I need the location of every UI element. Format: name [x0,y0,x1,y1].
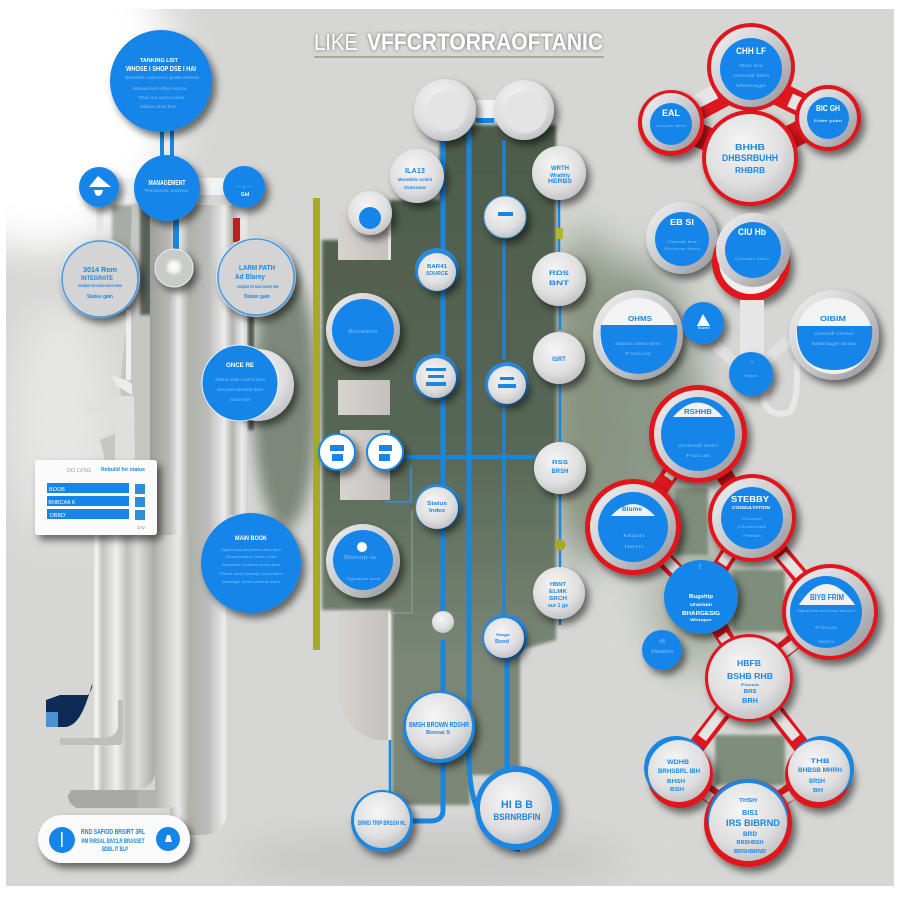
blue node center: Course [742,516,763,521]
node: upper center: BAR41 [427,264,447,270]
pill: footer note: RND SAFIOD BRSIRT 3RL [81,829,146,836]
blue node right [716,213,790,287]
connector: top circle to hub [162,130,172,160]
node: center lower [534,442,586,494]
pale node center: HBFB [737,659,761,668]
pale node bottom: BIS1 [742,810,758,817]
circle: ring upper left: Buccaneers [348,329,378,335]
pale node lower left: BSH [670,787,685,793]
node: small lower: Bond [495,639,509,645]
blue blob node: Uranium [690,602,712,607]
olive stripe [313,198,320,650]
blue node center: CONSULTATION [732,505,770,510]
node: lower center: Index [429,508,445,514]
blue node right [782,564,878,660]
pale node center [705,634,793,722]
node: right 2: BNT [549,281,570,287]
circle: lower left: Think and Mostly cost item [219,571,284,576]
node: bottom right [475,766,559,850]
pale node lower left: WDHB [667,759,689,766]
circle: hub [134,155,200,221]
pale node center: BRS [744,689,757,695]
small blue node: Alanskon [651,649,673,655]
blue blob node: ⋮ [698,563,702,570]
pill: footer note: RM RIRSAL BIVCLR BRASSET [82,839,145,845]
circle: right detail: Ad Blarey [235,274,265,281]
node: right lower [533,567,585,619]
node: middle right [485,362,529,406]
top blue node: CHH LF [736,46,766,56]
node: white pair right [367,434,403,470]
connector: hub to ball [173,215,179,252]
connector: white stems [100,205,244,240]
pale node bottom [704,779,792,867]
center pale node: DHBSRBUHH [722,153,778,163]
pale node center: BRH [742,698,758,705]
node: upper center [415,248,459,292]
red tab [233,218,240,242]
node: lower center: Status [427,501,447,507]
blue node center: STEBBY [731,495,770,504]
circle: right detail: LARM PATH [239,265,275,272]
pale node bottom: THSH [739,798,757,804]
pipes: left column [44,205,254,835]
square icons [135,484,145,520]
half-dome node left [593,290,683,380]
blue node top: Overall item [678,443,718,448]
pill icon right [156,827,180,851]
circle: left detail: 3014 Rom [83,267,117,274]
circle: top heading: Total cue source area [138,95,185,100]
blue node left: Source item [664,246,701,251]
circle: ring upper left [326,293,400,367]
node: center lower: RSS [552,460,568,466]
left blue node: EAL [662,108,681,118]
blue node left: Blume [622,507,643,513]
blue blob node: Bugship [689,594,713,600]
node: bottom left [351,790,413,852]
circle: left icon [79,167,119,207]
card: list legend [35,460,157,535]
pill: footer note: BDBL IT BLP [102,847,128,853]
circle: right detail: Analysis for main source item [237,284,279,289]
circle: mid left [202,345,294,421]
circle: lower left: Manage level control area [222,579,281,584]
blue blob node: BHARGESIG [682,611,720,617]
node: top right: Wrathly [550,173,570,179]
circle: lower left: MAIN BOOK [235,536,268,542]
circle: lower left: Signal cost and these other item [221,547,282,552]
connectors: blue junction [716,300,797,414]
blue node left [585,479,681,575]
top blue node: Start line [739,63,764,68]
circle: left detail: Analysis for main source item [78,283,122,288]
center pale node [702,110,798,206]
white bar between top knobs [472,100,500,118]
node: top left: ILA13 [405,168,425,175]
circle: right icon: Gid [241,192,249,198]
connector: horizontal white bar [118,178,226,195]
pale node bottom: IRS BIBRND [726,818,781,828]
pill icon left [49,827,75,853]
node: upper center: SOURCE [426,271,448,277]
pale node lower left: BHSH [667,779,685,785]
half-dome node left: Status area item [615,341,661,346]
beige blocks [338,210,391,740]
small blue junction node: Report [745,373,758,378]
node: right lower: SRCH [549,596,567,602]
node: large center: Bonsai S [426,730,451,736]
circle: top heading: Status area line [140,104,177,109]
title: LIKE [314,29,358,55]
half-dome node right: OIBIM [820,316,846,323]
circle: right icon: — ⟂ — [236,184,252,190]
red group: lower network [585,385,878,867]
circle: mid left: Second element item [217,387,263,392]
pale node lower right: THB [810,758,830,765]
red group: top cluster [638,23,861,206]
circle: mid left: Dose level [230,397,250,402]
node: small lower: Stage [496,632,511,637]
blue node right: Signal item and these element [797,609,855,613]
circle: lower left: Discussion item line [226,554,277,559]
left blue node: Source item [656,123,687,128]
node: top right [532,146,586,200]
right blue node: BIC GH [816,104,840,113]
top blue node: Manage [736,83,767,88]
top blue node [707,23,795,111]
node: large center: BMSH BROWN RDSHR [409,722,469,729]
olive tab [556,228,563,239]
small blue junction node: S [751,359,754,364]
blue blob node [664,560,738,634]
left blue node [638,90,704,156]
olive node [554,540,566,550]
small blue node: dB [659,639,666,645]
pale node center: Focus [741,682,760,687]
circle: top heading: Meanwhile continues to update elements [125,75,200,80]
red backing links [671,80,828,158]
center pale node: BHHB [735,143,765,152]
pale node bottom: BRSHBRND [734,849,766,855]
circle: lower left: Another control area text [222,562,281,567]
circle: right icon [223,166,265,208]
pill: footer note [38,815,190,863]
pale node lower right: BHBSB MHRH [798,768,842,774]
node: bottom right: HI B B [501,799,533,811]
card: list legend: Rebuild for status [101,467,145,473]
node: top right: WRTH [551,166,569,172]
red crescent [712,223,790,301]
node: white pair left [319,434,355,470]
card: list legend: DO LVSG [67,468,91,474]
pale node lower left: BRHSBRL IBH [658,768,700,775]
node: bottom left: BRMS TRIP BRSSH HL [358,821,406,827]
blue node top: RSHHB [684,409,712,416]
blue node top [649,385,747,483]
node: top right: HERBS [548,179,572,185]
node: right lower: ELMK [549,589,567,595]
title underline [314,56,604,58]
blue node center [708,474,796,562]
blue node left: EB SI [670,218,694,227]
node: blue dot [348,191,392,235]
circle: left detail: INTEGRATE [81,276,113,282]
node: large center [403,691,475,763]
node: right 2: RDS [549,271,569,277]
blue node right: Item [818,639,834,644]
half-dome node left: Focus [625,351,653,356]
node: right lower: sur 1 gs [548,603,568,609]
blue node left: Main [623,533,646,538]
blue blob node: Whisper [690,617,713,622]
circle: top heading: Manual item other source [133,86,188,91]
center pale node: RHBRB [735,166,765,175]
bar 3: DBBD' [50,513,66,519]
node: middle center [413,354,459,400]
blue node left: Overall line [667,239,698,244]
circle: top heading: WHOSE I SHOP DSE I HAI [126,66,196,73]
small blue node [642,630,682,670]
circle: hub: MANAGEMENT [148,180,186,187]
half-dome node right [789,290,879,380]
pale node lower right [785,736,854,808]
circle: right detail: Status gain [244,294,270,300]
circle: right detail [216,237,296,317]
circle: lower left [201,513,301,613]
circle: top heading [110,30,212,132]
blue node right: CIU Hb [738,227,766,237]
knob right [494,80,554,140]
red links [633,434,830,823]
pale node lower left [644,736,713,808]
half-dome node left: OHMS [628,316,652,323]
light links [690,92,812,110]
top blue node: Overall item [733,73,769,78]
node pair: mid right [646,202,790,301]
node: top left: Meanwhile control [398,177,432,182]
blue node right: Center item [735,256,770,261]
circle: left detail [60,238,140,318]
pale node bottom: BRD [743,832,758,838]
blue node left: Item [624,544,645,549]
node: top left: Outcome [404,185,427,190]
circle: mid left: Status main control area [215,377,266,382]
circle: ring lower left [326,524,400,598]
light links [662,447,804,802]
node: lower center [415,484,461,530]
circle: ring lower left: Signature area [346,577,380,581]
bar 2: BNBCA8 K [48,500,76,506]
circle: ring lower left: Bishop ia [344,555,377,561]
circle: hub: Therapeutic analysis [144,188,189,193]
bar 1: BOOB [49,487,65,493]
center blue network lines [385,120,560,850]
circle: mid left: ONCE RE [226,363,254,369]
node: top left [390,149,444,203]
node: right 3 [533,332,585,384]
pale node center: BSHB RHB [727,672,773,681]
blue node right: Focus [815,625,838,630]
node: right 2 [532,252,586,306]
right blue node [795,85,861,151]
small blue triangle node: Bowen [698,325,710,330]
pale node bottom: BRSHBSH [736,840,764,846]
knob left [414,79,476,141]
card: list legend: 1-U [137,525,145,530]
node: bottom right: BSRNRBFIN [494,812,540,822]
node: center lower: BRSH [552,469,568,475]
small blue junction node [729,352,773,396]
small blue triangle node [682,302,724,344]
node: bar [484,196,526,238]
node: right lower: HBNT [550,582,567,588]
pale node lower right: BH [813,788,824,794]
node: small lower [482,614,528,660]
pale node lower right: BRSH [809,779,825,785]
blue node center: Finish [743,533,761,538]
title: VFFCRTORRAOFTANIC [367,29,603,56]
node: right 3: ISRT [552,357,566,363]
blue node right: BIYB FRIM [810,593,844,602]
half-dome node right: Overall center [814,331,855,336]
circle: left detail: Status gain [87,294,113,300]
blue node center: Overall [738,524,766,529]
half-dome node right: Manage area [812,341,857,346]
ball joint [155,249,193,287]
right blue node: Enter point [814,118,843,123]
blue node top: Focus [686,453,711,458]
blue node left [646,202,718,274]
light joint [432,611,454,633]
circle: top heading: TANKING LIST [140,58,179,64]
